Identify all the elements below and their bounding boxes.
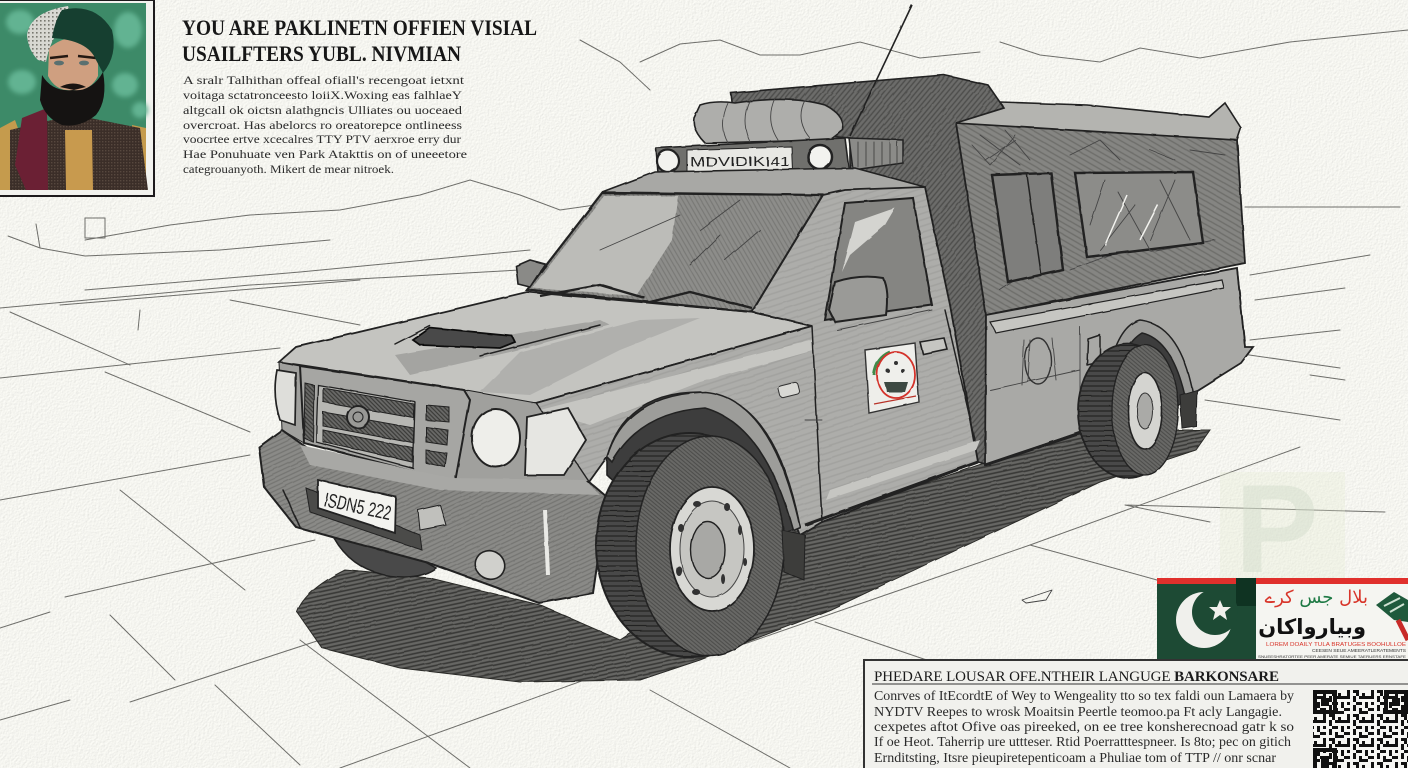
front fender flare <box>607 392 800 530</box>
front wheel well <box>607 392 800 560</box>
banner small print <box>1258 642 1406 659</box>
rear fender flare <box>1104 320 1193 424</box>
panel body text: NYDTV Reepes to wrosk Moaitsin Peertle teomoo.pa Ft acly Langagie. <box>874 705 1282 720</box>
licence plate <box>318 480 396 533</box>
camper roof strip <box>956 102 1241 140</box>
door handle <box>920 338 947 354</box>
panel body text: If oe Heot. Taherrip ure uttteser. Rtid Poerratttespneer. Is 8to; pec on gitich <box>874 735 1291 750</box>
front mud flap <box>782 530 805 580</box>
portrait <box>0 0 155 197</box>
title <box>182 15 537 66</box>
far front wheel <box>334 538 436 577</box>
panel body text <box>874 689 1294 766</box>
roof light bar: MDVIDIKI41 <box>690 154 790 169</box>
urdu black line: وبیارواکان <box>1258 615 1366 639</box>
panel body text: Conrves of ItEcordtE of Wey to Wengeality tto so tex faldi oun Lamaera by <box>874 689 1294 704</box>
hood scoop <box>413 328 515 348</box>
faint watermark: P <box>1235 460 1318 599</box>
camper box side <box>956 123 1245 315</box>
cab sill and step <box>805 425 1105 525</box>
intro text block: voocrtee ertve xcecalres TTY PTV aerxroe erry dur <box>183 132 461 146</box>
intro text block: Hae Ponuhuate ven Park Atakttis on of uneeetore <box>183 147 467 161</box>
left headlights <box>275 370 296 425</box>
panel body text: Ernditsting, Itsre pieupiretepenticoam a Phuliae tom of TTP // onr scnar <box>874 751 1276 766</box>
cab roof <box>602 168 935 240</box>
rear wheel <box>1078 344 1178 478</box>
small side window <box>992 173 1063 282</box>
lamp housing and left grille side <box>279 362 589 482</box>
urdu red and green line: بلال جس کرے <box>1265 587 1368 608</box>
windshield <box>527 193 823 312</box>
bed lower panel <box>985 268 1253 465</box>
door emblem <box>865 343 919 413</box>
flag banner <box>1157 578 1408 660</box>
rear wheel well <box>1104 320 1193 430</box>
door window <box>825 198 932 320</box>
intro text block: voitaga sctatronceesto loiiX.Woxing eas falhlaeY <box>183 88 462 102</box>
panel heading: PHEDARE LOUSAR OFE.NTHEIR LANGUGE BARKONSARE <box>874 669 1279 685</box>
banner small print: LOREM DOAILY TULA BRATUGES BOOHULLOE <box>1266 642 1406 648</box>
grille assembly <box>300 366 470 482</box>
antenna <box>850 5 912 136</box>
ground shadow of the truck <box>297 430 1210 682</box>
door mirror <box>829 277 887 322</box>
faint watermark <box>1220 460 1345 599</box>
banner small print: CEESEN SEUE AMEERATLERATEMENTS <box>1312 648 1406 653</box>
cab side with door <box>536 187 980 535</box>
licence plate: ISDN5 222 <box>322 489 393 525</box>
green emblem <box>1376 592 1408 640</box>
truck illustration <box>259 5 1253 682</box>
round headlight <box>472 409 520 467</box>
front wheel <box>596 433 784 657</box>
side marker <box>778 382 800 398</box>
title: USAILFTERS YUBL. NIVMIAN <box>182 41 461 66</box>
banner small print: SNUEESHRATORTEE PEER AMERATE SEMIUE TAERUERS ERNSTAFE <box>1258 654 1406 659</box>
rear mud flap <box>1180 390 1197 428</box>
portrait face <box>48 38 98 90</box>
intro text block <box>183 73 467 176</box>
front bumper <box>259 430 607 603</box>
corner headlight <box>525 408 586 475</box>
fog lamp <box>470 545 510 585</box>
roof light bar <box>656 138 903 173</box>
intro text block: categrouanyoth. Mikert de mear nitroek. <box>183 162 394 176</box>
portrait clothing <box>0 120 146 190</box>
rolled roof bag <box>694 98 843 143</box>
title: YOU ARE PAKLINETN OFFIEN VISIAL <box>182 15 537 40</box>
bottom note panel <box>864 660 1408 768</box>
portrait beard <box>40 72 104 126</box>
large side window <box>1075 172 1203 257</box>
portrait turban <box>27 6 72 62</box>
intro text block: altgcall ok oictsn alathgncis Ulliates ou uoceaed <box>183 103 462 117</box>
intro text block: overcroat. Has abelorcs ro oreatorepce ontlineess <box>183 118 462 132</box>
panel body text: cexpetes aftot Ofive oas pireeked, on ee tree konsherecnoad gatr k so <box>874 720 1294 735</box>
QR code <box>1313 690 1408 768</box>
hood <box>279 292 812 403</box>
intro text block: A sralr Talhithan offeal ofiall's recengoat ietxnt <box>183 73 465 87</box>
left side mirror <box>516 260 545 287</box>
flag <box>1157 578 1256 660</box>
wipers <box>540 285 752 308</box>
camper box front face and roof cap <box>731 75 1004 465</box>
